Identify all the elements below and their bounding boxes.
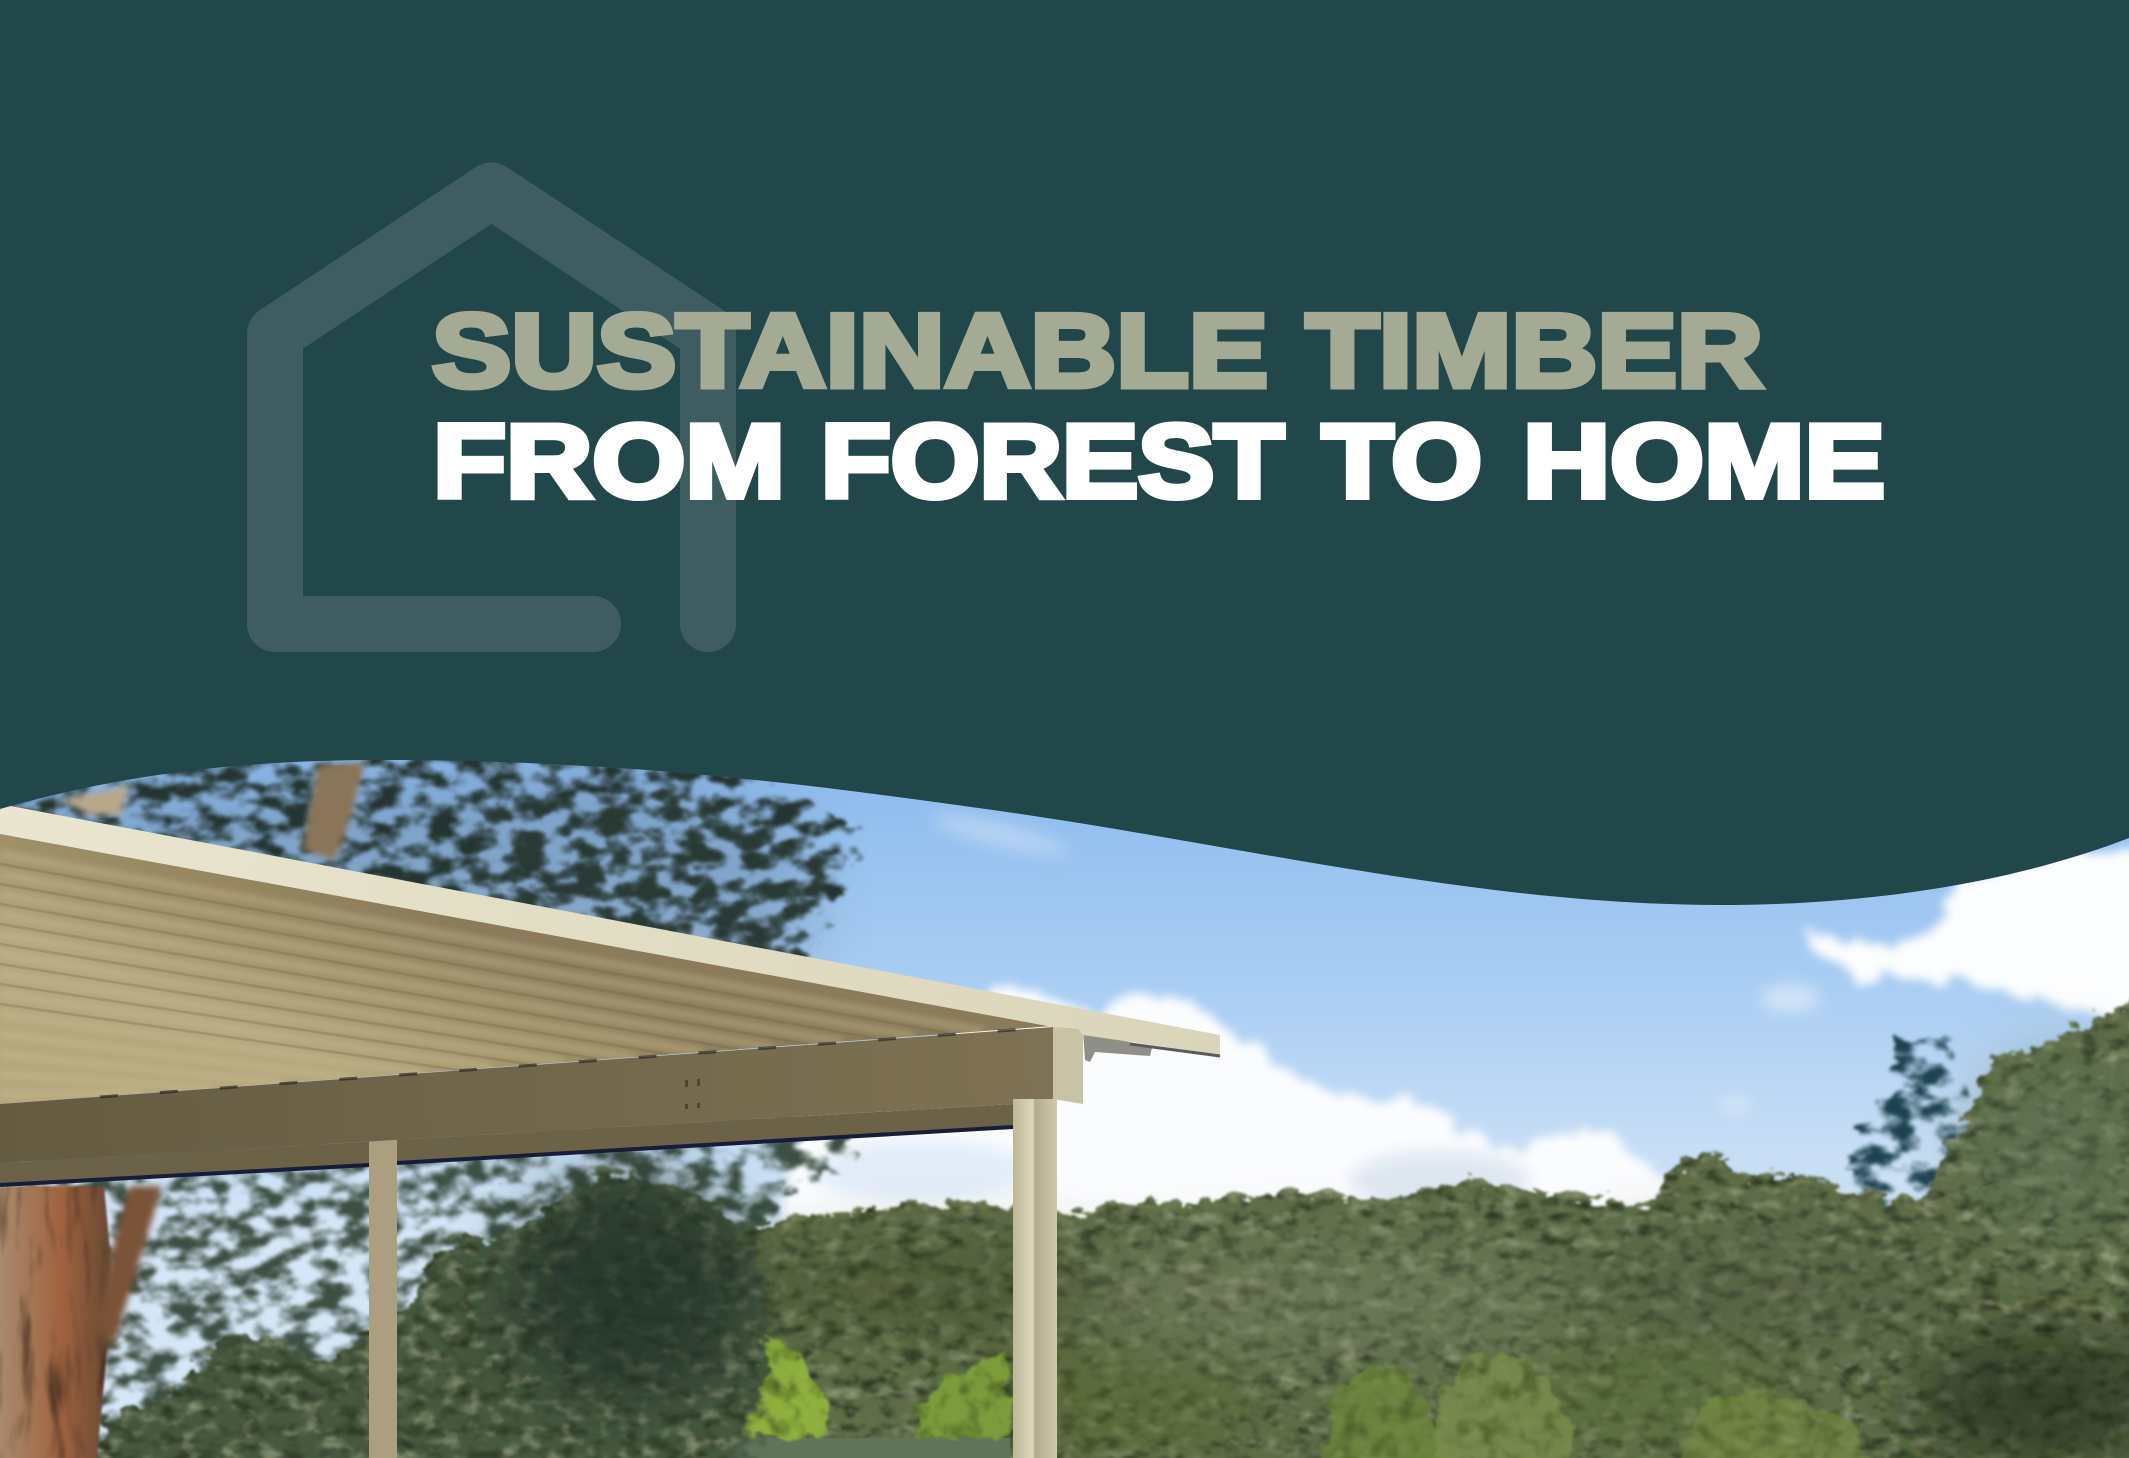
soffit shadow lines — [0, 864, 948, 1070]
bush: lower canopy one — [1320, 1360, 1440, 1458]
cloud: below roof haze — [810, 1140, 1030, 1200]
forest: tonal variation — [760, 1060, 2129, 1458]
rail shadow — [0, 1127, 1013, 1185]
bush: lower canopy two — [1430, 1350, 1570, 1458]
title — [432, 294, 1885, 520]
title line 2: HOME — [1523, 404, 1885, 520]
cloud: shaded base — [1350, 1150, 1530, 1210]
tree: trunk — [0, 1186, 112, 1458]
bush: bright centre — [917, 1345, 1012, 1438]
icon: house outline watermark — [275, 190, 708, 624]
tree: dense lower foliage — [90, 1170, 770, 1458]
tree: denser crown — [460, 790, 830, 1000]
title line 2: FOREST — [821, 404, 1284, 520]
title line 2 — [433, 404, 1885, 520]
forest: thin blue tree on the right — [1845, 1040, 1985, 1210]
fascia drip edge — [1130, 1044, 1220, 1056]
tree: foliage below the roof, airy — [0, 1120, 860, 1458]
cloud: large centre — [790, 985, 1680, 1260]
bracket — [1053, 1027, 1083, 1104]
tree: gum tree foliage, upper — [0, 750, 860, 1000]
forest: tree line — [640, 995, 2129, 1458]
cloud: top right — [1806, 830, 2129, 1040]
beam — [0, 1027, 1053, 1163]
beam lower rail — [0, 1104, 1013, 1184]
title line 2: TO — [1322, 404, 1482, 520]
bush: bright left — [678, 1335, 830, 1438]
fascia — [0, 804, 1220, 1055]
photo: veranda roof with forest and sky — [0, 740, 2129, 1458]
title line 1: SUSTAINABLE — [432, 294, 1268, 410]
tree: darker crown below roof — [510, 1180, 750, 1400]
water — [640, 1438, 1010, 1458]
bush: lower canopy three — [1680, 1390, 1880, 1458]
sky — [0, 740, 2129, 1458]
tree: branch top left — [60, 785, 130, 815]
soffit corrugations — [0, 854, 983, 1094]
soffit — [0, 834, 1053, 1104]
post: left — [369, 1137, 397, 1458]
gutter end — [1083, 1030, 1152, 1062]
title line 1: TIMBER — [1306, 294, 1763, 410]
tree: haze behind upper foliage — [0, 770, 810, 1000]
beam top notches — [100, 1027, 1053, 1097]
title line 2: FROM — [433, 404, 785, 520]
tree: upper trunk — [303, 762, 365, 860]
wave: dark header panel — [0, 0, 2129, 905]
cloud: thin wisps — [929, 806, 1820, 1115]
post: right — [1013, 1099, 1057, 1458]
beam bolts — [685, 1079, 700, 1109]
title line 1 — [432, 294, 1763, 410]
tree: trunk fork — [98, 1186, 162, 1350]
